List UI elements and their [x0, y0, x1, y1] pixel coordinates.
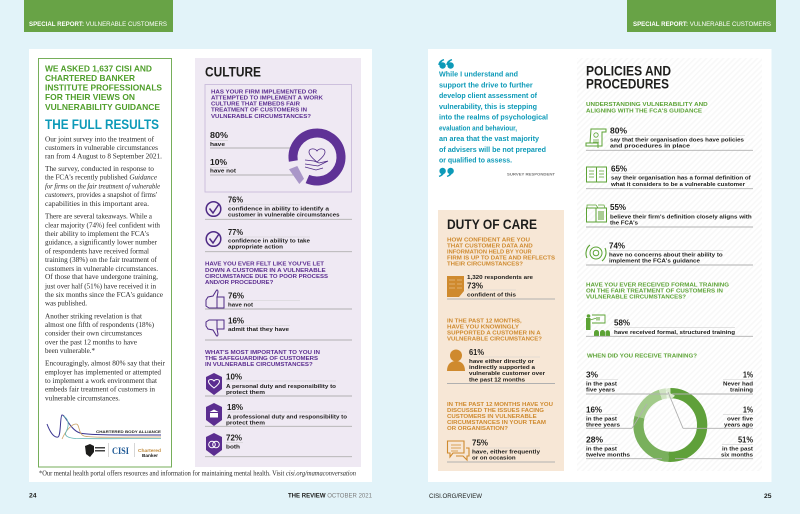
folio: website: CISI.ORG/REVIEW — [429, 493, 482, 500]
question: let down a customer: AND/OR PROCEDURE? — [205, 280, 274, 286]
stat: 80% policies: 80% — [610, 125, 627, 135]
body copy: training (38%) on the fair treatment of — [45, 255, 157, 264]
pull quote: develop client assessment of — [439, 91, 538, 100]
body copy — [44, 134, 165, 403]
pull quote: support the drive to further — [439, 80, 533, 89]
stat: 73% confident: confident of this — [467, 293, 517, 299]
body copy: The survey, conducted in response to — [45, 164, 154, 173]
logo: member institutes: Chartered — [138, 448, 161, 454]
question: safeguarding — [205, 350, 320, 368]
body copy: customers in vulnerable circumstances — [45, 143, 158, 152]
question: customer data: FIRM IS UP TO DATE AND REFLECTS — [447, 256, 555, 262]
body copy: just over half (51%) have received it in — [44, 281, 156, 290]
body copy: over the past 12 months to have — [45, 337, 138, 346]
green intro heading: VULNERABILITY GUIDANCE — [45, 103, 161, 112]
left page white panel — [29, 49, 372, 482]
culture question box: have — [210, 142, 226, 148]
stat: 73% confident: 1,320 respondents are — [467, 275, 534, 281]
question: let down a customer: HAVE YOU EVER FELT LIKE YOU'VE LET — [205, 262, 325, 268]
logo: member institutes: CISI — [112, 446, 129, 456]
label: 51% six months: in the past — [722, 446, 753, 452]
culture question box — [205, 84, 352, 192]
label: 3% five years: five years — [586, 388, 616, 394]
stat: 75% discussed — [447, 438, 555, 462]
body copy: embeds fair treatment of customers in — [45, 385, 155, 394]
question: customer data: INFORMATION HELD BY YOUR — [447, 250, 532, 256]
page number 24: 24 — [29, 493, 37, 500]
stat: 58% trained — [586, 314, 753, 336]
left page header band — [24, 0, 173, 32]
stat: 73% confident — [447, 275, 555, 299]
label: 51% six months: 51% — [738, 434, 753, 444]
label: 51% six months: six months — [721, 452, 754, 458]
pull quote: While I understand and — [439, 70, 518, 79]
culture heading: CULTURE — [205, 64, 261, 80]
stat: 61% supported: indirectly supported a — [469, 365, 536, 371]
stat: professional duty 18% — [205, 402, 352, 426]
stat: 55% aligns: 55% — [610, 202, 626, 212]
subheading: understanding vulnerability: ALIGNING WITH THE FCA'S GUIDANCE — [586, 108, 702, 114]
logo: chartered body alliance: CHARTERED BODY ALLIANCE — [96, 429, 161, 434]
folio: the review: THE REVIEW OCTOBER 2021 — [288, 493, 372, 500]
body copy: Encouragingly, almost 80% say that their — [45, 358, 165, 367]
stat: 76% identify — [205, 194, 352, 219]
stat: 75% discussed: 75% — [472, 438, 488, 448]
label: 28% twelve months: in the past — [586, 446, 617, 452]
stat: 65% definition: what it considers to be a vulnerable customer — [610, 182, 746, 188]
donut chart: culture — [289, 130, 344, 184]
stat: 65% definition — [586, 163, 753, 189]
panel: the full results — [38, 58, 172, 467]
pull quote: vulnerability, this is stepping — [439, 102, 537, 111]
label: 16% three years — [586, 404, 632, 428]
body copy: capabilities in this important area. — [45, 199, 149, 208]
green intro heading: FOR THEIR VIEWS ON — [45, 93, 135, 102]
green intro heading — [45, 64, 163, 112]
pull quote — [438, 59, 556, 177]
left page header band: SPECIAL REPORT: VULNERABLE CUSTOMERS — [29, 21, 167, 28]
question: let down a customer: CIRCUMSTANCE DUE TO POOR PROCESS — [205, 274, 328, 280]
stat: 58% trained: 58% — [614, 318, 630, 328]
culture question box: TREATMENT OF CUSTOMERS IN — [211, 108, 307, 114]
question: formal training: VULNERABLE CIRCUMSTANCES? — [586, 294, 687, 300]
culture question box: 10% — [210, 157, 227, 167]
question: knowingly supported: IN THE PAST 12 MONTHS, — [447, 318, 522, 324]
policies heading: PROCEDURES — [586, 75, 669, 91]
stat: 80% policies: and procedures in place — [610, 144, 691, 150]
subheading: when trained: WHEN DID YOU RECEIVE TRAINING? — [587, 353, 698, 359]
question: customer data: THEIR CIRCUMSTANCES? — [447, 262, 524, 268]
right page header band: SPECIAL REPORT: VULNERABLE CUSTOMERS — [633, 21, 771, 28]
label: 1% never had training: Never had — [723, 382, 753, 388]
culture question box: ATTEMPTED TO IMPLEMENT A WORK — [211, 96, 324, 102]
green intro heading: INSTITUTE PROFESSIONALS — [45, 84, 163, 92]
stat: personal duty 10%: A personal duty and responsibility to — [226, 384, 336, 390]
green intro heading: WE ASKED 1,637 CISI AND — [45, 64, 152, 74]
question: discussed issues: IN THE PAST 12 MONTHS HAVE YOU — [447, 402, 553, 408]
question: discussed issues: OR ORGANISATION? — [447, 426, 509, 432]
label: 3% five years: in the past — [586, 382, 617, 388]
body copy: almost one fifth of respondents (18%) — [45, 320, 154, 329]
question: knowingly supported: HAVE YOU KNOWINGLY — [447, 324, 519, 330]
question: discussed issues — [447, 402, 553, 432]
panel: culture — [195, 58, 361, 467]
right page white panel — [428, 49, 772, 482]
stat: 74% no concerns: 74% — [609, 240, 625, 250]
stat: personal duty 10%: 10% — [226, 371, 242, 381]
pull quote: evaluation and behaviour, — [439, 123, 517, 132]
label: 1% over five years: years ago — [724, 422, 753, 428]
stat: 75% discussed: have, either frequently — [472, 450, 541, 456]
question: formal training: HAVE YOU EVER RECEIVED FORMAL TRAINING — [586, 282, 730, 288]
stat: personal duty 10% — [205, 371, 352, 396]
question: let down a customer: DOWN A CUSTOMER IN A VULNERABLE — [205, 268, 326, 274]
stat: 76% identify: confidence in ability to identify a — [228, 207, 330, 213]
label: 51% six months — [675, 434, 754, 459]
culture question box: have not — [210, 169, 236, 175]
stat: 55% aligns — [586, 202, 753, 227]
question: customer data — [447, 238, 555, 268]
stat: professional duty 18%: A professional duty and responsibility to — [227, 414, 347, 420]
panel: policies and procedures — [577, 58, 762, 471]
pull quote: into the realms of psychological — [439, 113, 548, 122]
stat: personal duty 10%: protect them — [226, 390, 265, 396]
label: 1% over five years — [683, 404, 754, 428]
pull quote: an area that the vast majority — [439, 134, 539, 143]
stat: 77% action: confidence in ability to take — [228, 239, 311, 245]
quote attribution: SURVEY RESPONDENT — [507, 173, 556, 177]
question: formal training: ON THE FAIR TREATMENT OF CUSTOMERS IN — [586, 288, 723, 294]
stat: 65% definition: 65% — [611, 163, 627, 173]
body copy: for firms on the fair treatment of vulnerable — [45, 181, 160, 190]
question: discussed issues: DISCUSSED THE ISSUES FACING — [447, 408, 545, 414]
stat: 61% supported: the past 12 months — [469, 378, 526, 384]
label: 1% never had training — [672, 370, 753, 394]
stat: thumbs down 16%: 16% — [228, 315, 244, 325]
duty of care heading: DUTY OF CARE — [447, 216, 537, 232]
right page header band — [627, 0, 776, 32]
body copy: the six months since the FCA's guidance — [45, 290, 164, 299]
label: 1% never had training: 1% — [743, 370, 753, 380]
body copy: customers in vulnerable circumstances. — [45, 264, 158, 273]
stat: 76% identify: customer in vulnerable circumstances — [228, 213, 340, 219]
stat: 80% policies — [586, 125, 753, 150]
question: safeguarding: WHAT'S MOST IMPORTANT TO YOU IN — [205, 350, 320, 356]
icon: heart in hand — [305, 149, 328, 170]
label: 1% over five years: 1% — [743, 404, 753, 414]
question: formal training — [586, 282, 730, 300]
body copy: of respondents have received formal — [45, 246, 149, 255]
body copy: vulnerable circumstances. — [45, 394, 120, 403]
stat: 77% action — [205, 227, 352, 252]
body copy: Another striking revelation is that — [45, 311, 143, 320]
stat: thumbs up 76%: have not — [228, 303, 253, 309]
stat: 65% definition: say their organisation has a formal definition of — [611, 176, 751, 182]
stat: 61% supported — [447, 347, 555, 384]
logo: member institutes: Banker — [142, 453, 158, 459]
page number 25: 25 — [764, 493, 772, 500]
policies heading: POLICIES AND — [586, 63, 671, 79]
question: knowingly supported: VULNERABLE CIRCUMSTANCE? — [447, 336, 543, 342]
stat: 77% action: 77% — [228, 227, 243, 237]
body copy: customers, provides a snapshot of firms' — [45, 190, 158, 199]
footnote: *Our mental health portal offers resources and information for maintaining mental health. Visit cisi.org/mamaconversation — [39, 471, 357, 478]
stat: 58% trained: have received formal, structured training — [614, 330, 735, 336]
body copy: employer has implemented or attempted — [45, 367, 161, 376]
question: customer data: HOW CONFIDENT ARE YOU — [447, 238, 530, 244]
stat: both 72%: 72% — [226, 432, 242, 442]
culture question box: 80% — [210, 130, 228, 140]
culture question box: CULTURE THAT EMBEDS FAIR — [211, 102, 300, 108]
body copy: guidance, a significantly lower number — [45, 238, 157, 247]
stat: 61% supported: have either directly or — [469, 359, 535, 365]
stat: 77% action: appropriate action — [228, 245, 283, 251]
question: customer data: THAT CUSTOMER DATA AND — [447, 244, 533, 250]
question: knowingly supported — [447, 318, 543, 342]
stat: 61% supported: vulnerable customer over — [469, 371, 546, 377]
question: safeguarding: IN VULNERABLE CIRCUMSTANCES? — [205, 362, 313, 368]
body copy: Of those that have undergone training, — [45, 272, 158, 281]
label: 3% five years — [586, 370, 668, 394]
label: 28% twelve months: twelve months — [586, 452, 631, 458]
pull quote: of advisers will be not prepared — [439, 145, 546, 154]
body copy: their ability to implement the FCA's — [45, 229, 149, 238]
icon: opening quote — [438, 59, 454, 69]
stat: 74% no concerns: implement the FCA's guidance — [609, 259, 701, 265]
stat: 74% no concerns: have no concerns about their ability to — [609, 253, 723, 259]
label: 16% three years: 16% — [586, 404, 602, 414]
pull quote: or qualified to assess. — [439, 156, 512, 165]
subheading: understanding vulnerability: UNDERSTANDING VULNERABILITY AND — [586, 102, 708, 108]
stat: 73% confident: 73% — [467, 280, 483, 290]
label: 16% three years: three years — [586, 422, 621, 428]
stat: 74% no concerns — [586, 240, 753, 265]
stat: both 72%: both — [226, 444, 240, 450]
label: 3% five years: 3% — [586, 370, 598, 380]
stat: professional duty 18%: protect them — [226, 420, 265, 426]
stat: thumbs up 76% — [205, 290, 352, 309]
label: 1% over five years: over five — [727, 416, 754, 422]
icon: closing quote — [439, 168, 454, 177]
stat: thumbs down 16% — [205, 315, 352, 340]
body copy: Our joint survey into the treatment of — [45, 134, 154, 144]
stat: thumbs up 76%: 76% — [228, 290, 244, 300]
policies heading — [586, 63, 671, 91]
stat: professional duty 18%: 18% — [227, 402, 243, 412]
body copy: clear majority (74%) feel confident with — [45, 220, 160, 229]
question: discussed issues: CUSTOMERS IN VULNERABLE — [447, 414, 537, 420]
body copy: There are several takeaways. While a — [45, 212, 153, 221]
stat: 80% policies: say that their organisation does have policies — [610, 138, 745, 144]
stat: 55% aligns: believe their firm's definition closely aligns with — [610, 214, 752, 220]
full results heading: THE FULL RESULTS — [45, 117, 159, 132]
green intro heading: CHARTERED BANKER — [45, 74, 135, 83]
question: safeguarding: THE SAFEGUARDING OF CUSTOMERS — [205, 356, 318, 362]
stat: both 72% — [205, 432, 352, 457]
body copy: been vulnerable.* — [45, 346, 95, 355]
question: discussed issues: CIRCUMSTANCES IN YOUR TEAM — [447, 420, 546, 426]
body copy: was published. — [45, 299, 87, 308]
panel: duty of care — [438, 210, 564, 471]
label: 28% twelve months: 28% — [586, 434, 603, 444]
label: 16% three years: in the past — [586, 416, 617, 422]
culture question box: VULNERABLE CIRCUMSTANCES? — [211, 114, 312, 120]
logo: member institutes — [85, 443, 161, 459]
stat: thumbs down 16%: admit that they have — [228, 327, 290, 333]
stat: 61% supported: 61% — [469, 347, 484, 357]
subheading: understanding vulnerability — [586, 102, 708, 114]
body copy: the FCA's recently published Guidance — [45, 173, 158, 182]
label: 28% twelve months — [586, 434, 662, 459]
donut chart: when received training — [632, 392, 702, 457]
stat: 75% discussed: or on occasion — [472, 456, 516, 462]
body copy: ran from 4 August to 8 September 2021. — [45, 152, 162, 161]
logo: chartered body alliance — [47, 415, 161, 439]
culture question box: HAS YOUR FIRM IMPLEMENTED OR — [211, 90, 317, 96]
body copy: consider their own circumstances — [45, 329, 142, 338]
stat: 76% identify: 76% — [228, 194, 243, 204]
stat: 55% aligns: the FCA's — [610, 220, 639, 226]
question: knowingly supported: SUPPORTED A CUSTOMER IN A — [447, 330, 541, 336]
body copy: to implement a work environment that — [45, 376, 158, 385]
label: 1% never had training: training — [730, 388, 753, 394]
question: let down a customer — [205, 262, 328, 286]
